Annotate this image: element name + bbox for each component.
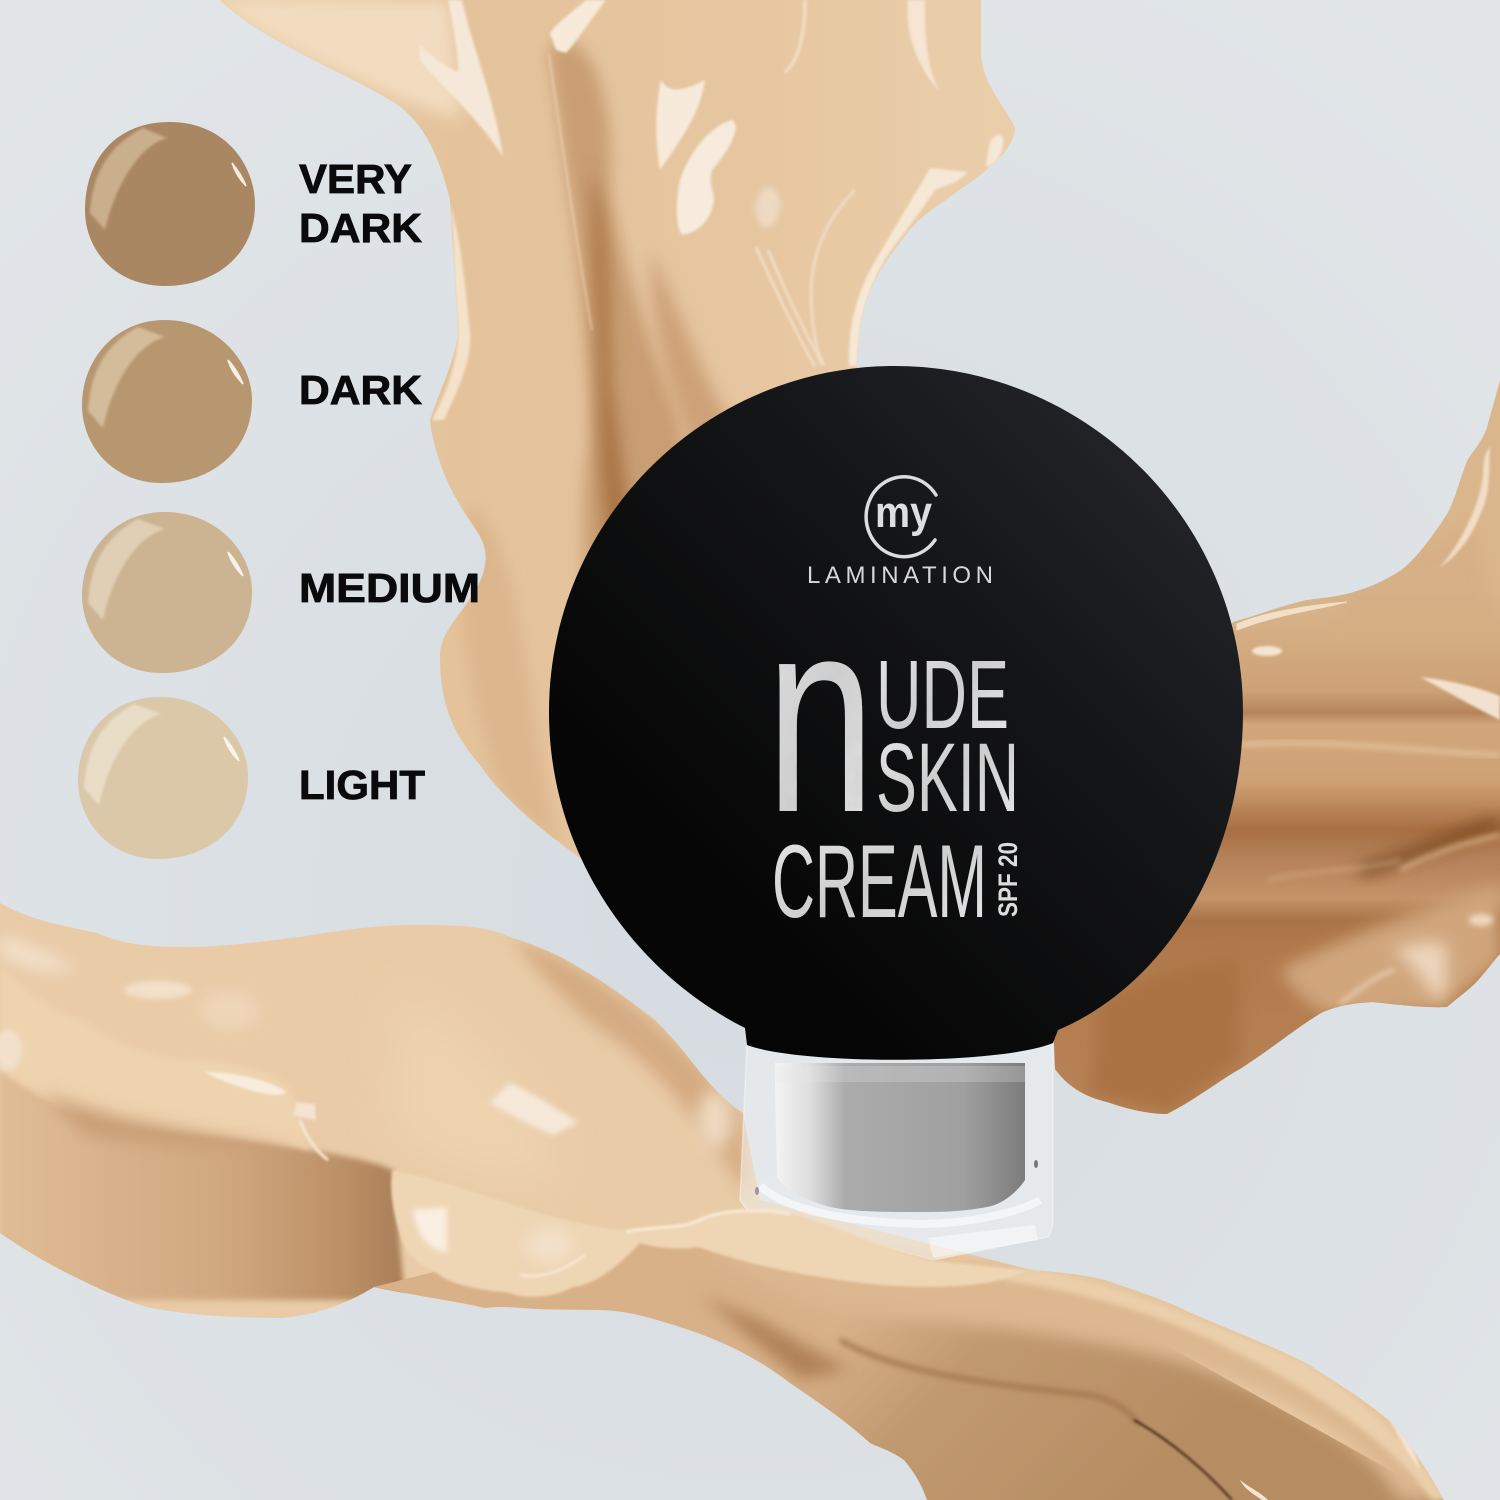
splash: bottom cream ribbon [0,900,1450,1500]
lower right ribbon body [374,1240,1444,1500]
swatch: dark [82,320,252,483]
cream lip in front of jar [391,1170,1031,1297]
upper left fold [14,1072,310,1152]
title: ude: UDE [876,640,1009,749]
cream highlights [420,0,503,157]
cream highlights [1420,677,1500,720]
swatch: very dark [85,122,255,286]
cream highlights [490,1083,578,1135]
title: cream: CREAM [772,824,987,940]
logo: my: my [875,488,932,537]
product cap [549,366,1243,1060]
title: large n: n [766,559,875,870]
swatch: light [78,697,248,859]
logo ring [866,477,936,557]
jar base [740,1043,1053,1260]
splash: right cream ribbon [1054,380,1500,1114]
splash: top cream ribbon [200,0,1030,880]
logo: lamination: LAMINATION [807,562,993,589]
jar powder cylinder [775,1063,1025,1212]
label: very dark second line: DARK [299,205,422,251]
swatch: medium [82,512,252,673]
label: very dark: VERY [299,156,412,202]
label: light: LIGHT [299,762,425,808]
title: spf 20: SPF 20 [993,842,1023,917]
label: medium: MEDIUM [299,565,480,611]
lower left bulge [0,1070,405,1300]
title: skin: SKIN [876,723,1019,832]
label: dark: DARK [299,367,422,413]
